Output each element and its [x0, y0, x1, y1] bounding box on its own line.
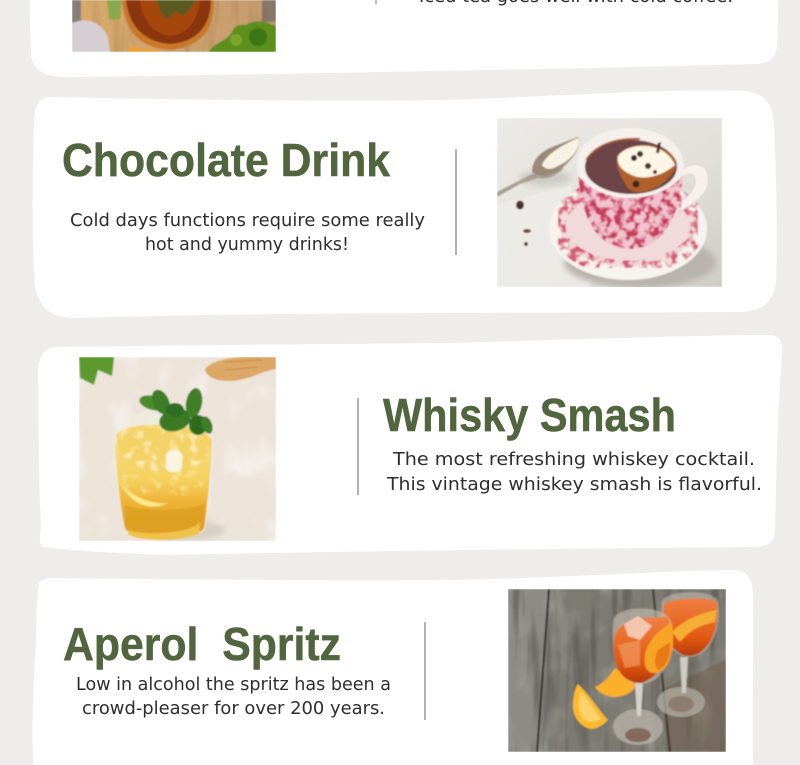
heading: chocolate drink: Chocolate Drink — [62, 134, 390, 186]
text: whisky description: This vintage whiskey smash is flavorful. — [386, 475, 762, 495]
panel: chocolate drink — [33, 90, 777, 318]
text: chocolate description — [70, 211, 425, 255]
photo: aperol spritz — [508, 589, 726, 752]
divider: chocolate — [456, 149, 457, 255]
divider: whisky — [358, 398, 359, 495]
panel: aperol spritz — [33, 570, 753, 765]
photo: hot chocolate — [497, 118, 722, 288]
panel: iced tea — [30, 0, 778, 77]
photo: whisky smash — [79, 357, 276, 541]
text: whisky description: The most refreshing whiskey cocktail. — [392, 450, 755, 470]
divider: aperol — [424, 622, 426, 720]
text: whisky description — [386, 450, 762, 495]
heading: aperol spritz: Aperol Spritz — [63, 618, 341, 670]
text: chocolate description: hot and yummy drinks! — [145, 235, 349, 255]
text: aperol description: Low in alcohol the spritz has been a — [76, 675, 391, 695]
panel: whisky smash — [38, 335, 782, 555]
heading: whisky smash: Whisky Smash — [383, 389, 676, 441]
divider: iced tea — [376, 0, 377, 4]
photo: iced tea — [72, 0, 276, 52]
text: aperol description — [76, 675, 391, 719]
text: aperol description: crowd-pleaser for over 200 years. — [82, 699, 385, 719]
text: chocolate description: Cold days functions require some really — [70, 211, 425, 231]
